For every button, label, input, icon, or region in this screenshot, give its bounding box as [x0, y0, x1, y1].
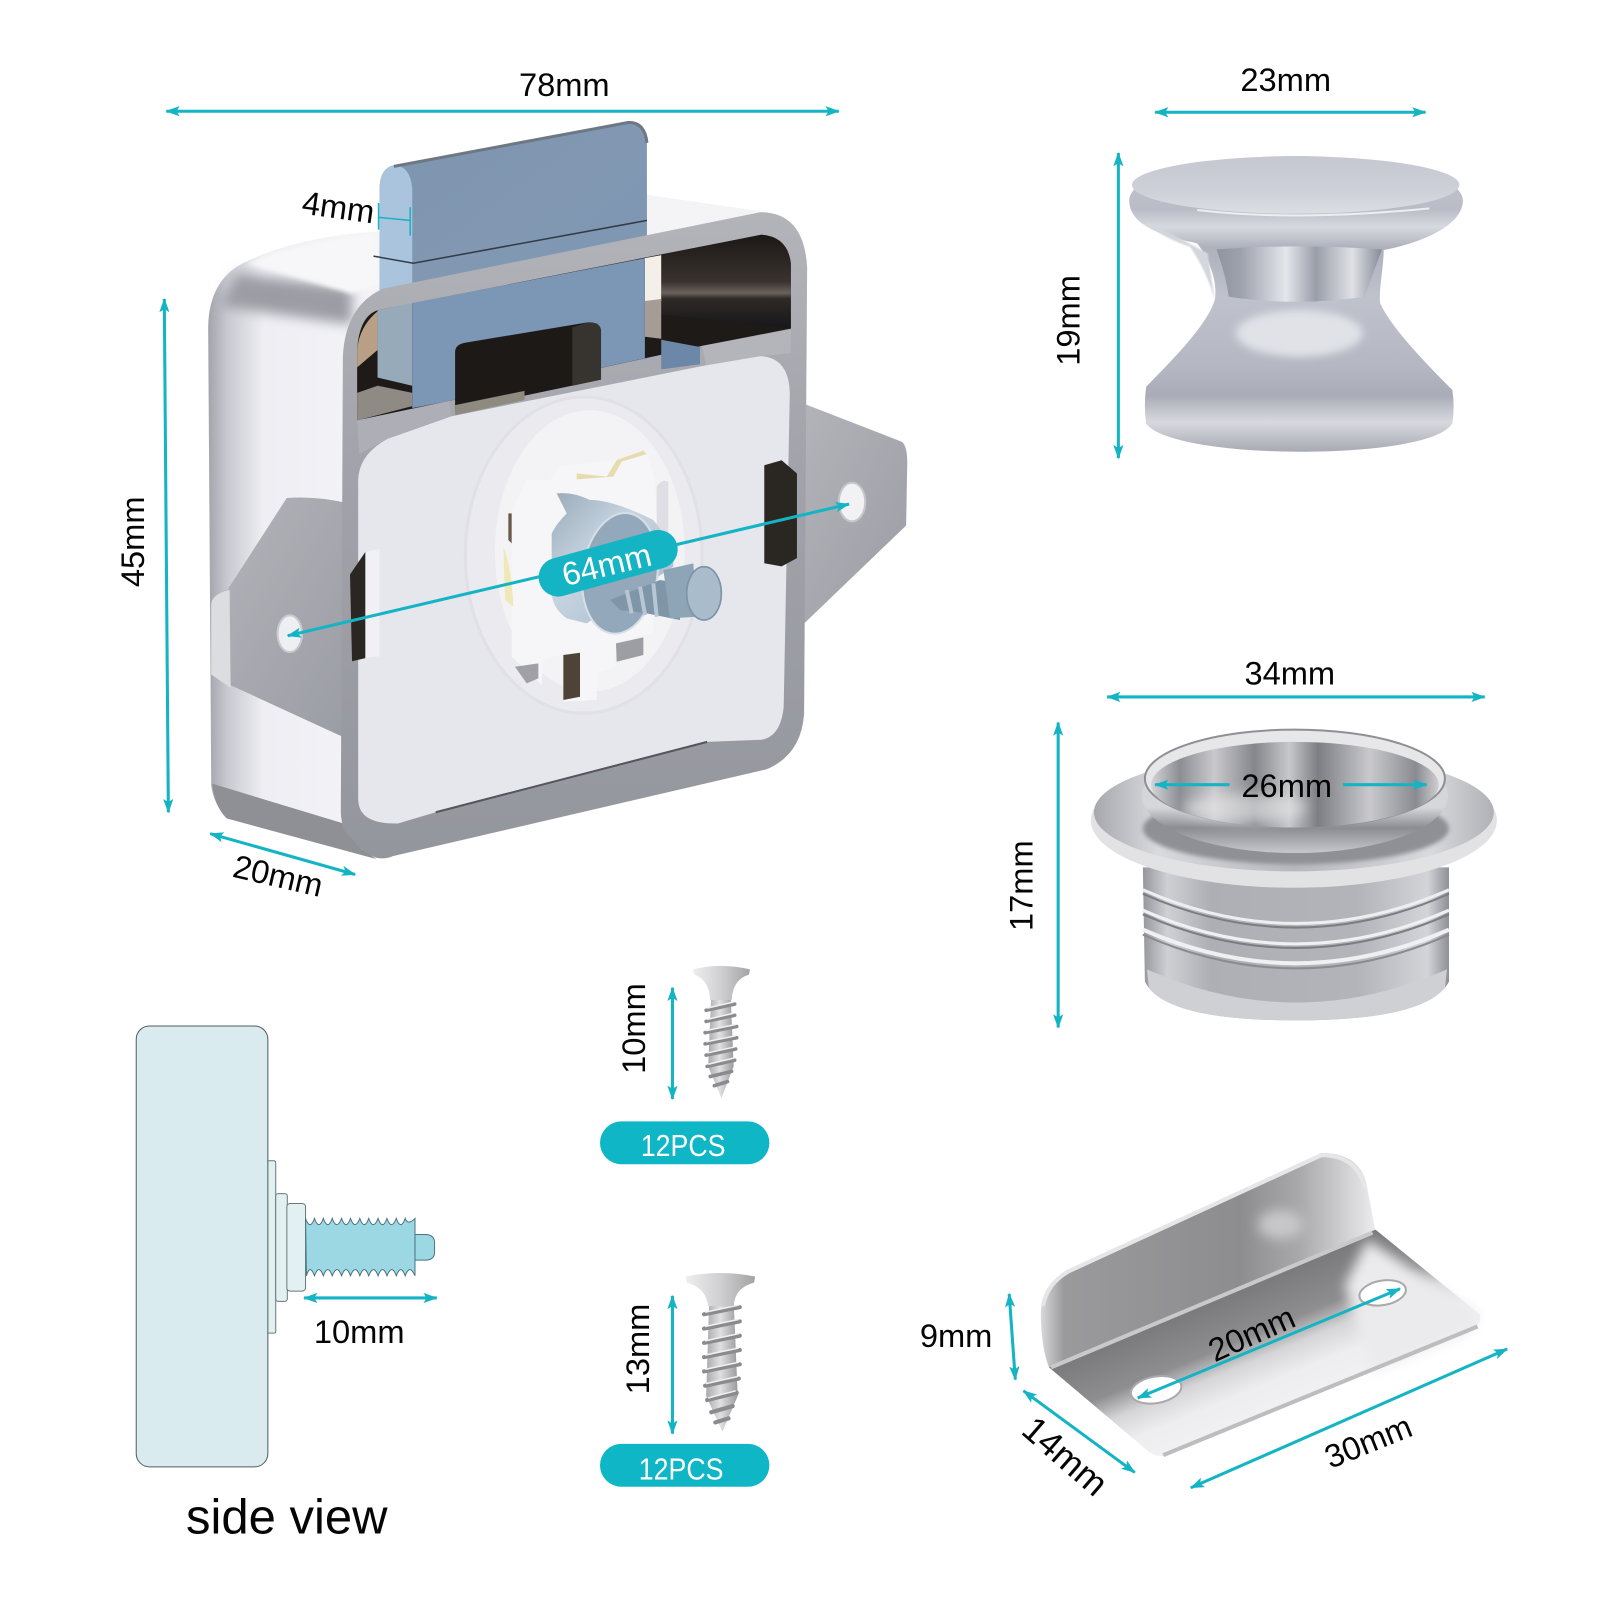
side view body: [136, 1026, 268, 1467]
housing corner shading: [220, 273, 352, 324]
badge: 12PCS long screw: [600, 1444, 769, 1487]
bolt thread: [610, 580, 680, 620]
knob left glint: [1144, 220, 1215, 300]
label: 10mm side view: 10mm: [314, 1313, 405, 1350]
strike plate fold line: [1051, 1233, 1372, 1367]
knob silhouette: [1129, 156, 1463, 452]
yellow tab: [577, 451, 647, 479]
arrow: 26mm right: [1343, 783, 1427, 786]
short screw threads dark: [705, 1004, 737, 1086]
arrow: 34mm: [1107, 695, 1485, 698]
short screw threads light: [706, 1002, 736, 1064]
flange shadow band: [1143, 793, 1449, 864]
bolt tip: [687, 567, 721, 620]
lower left metal tab: [515, 663, 538, 683]
bolt step: [663, 563, 697, 618]
label: 9mm: 9mm: [920, 1317, 992, 1354]
label: 30mm: 30mm: [1319, 1407, 1417, 1476]
inner bracket: [512, 452, 657, 702]
label: 12PCS long: 12PCS: [639, 1453, 723, 1487]
label: 14mm: 14mm: [1014, 1409, 1116, 1504]
dimension: 20mm strike plate: [1138, 1289, 1400, 1398]
dimension: 9mm: [920, 1294, 1015, 1380]
arrow: 10mm side view: [304, 1296, 437, 1299]
left mounting ear: [211, 498, 347, 739]
long screw threads dark: [704, 1307, 740, 1422]
arrow: 19mm: [1117, 153, 1120, 458]
side view boss: [287, 1203, 306, 1291]
label: 64mm: 64mm: [558, 536, 655, 593]
round recess: [465, 397, 702, 713]
long screw threads light: [705, 1305, 739, 1398]
dimension: 13mm screw: [619, 1296, 672, 1434]
housing top right face: [647, 195, 767, 240]
label: 78mm: 78mm: [519, 66, 610, 103]
side view collar: [276, 1194, 287, 1301]
pill: long screw: [600, 1444, 769, 1487]
dimension: 14mm: [1014, 1391, 1135, 1504]
bolt thread ribs: [627, 583, 657, 617]
dimension: 10mm side view: [304, 1298, 437, 1350]
label: 17mm: 17mm: [1003, 840, 1040, 931]
knob neck: [1217, 246, 1382, 302]
strike plate hole right: [1357, 1277, 1408, 1309]
latch lower part: [412, 258, 645, 415]
arrow: 9mm: [1009, 1294, 1015, 1380]
housing bottom edge: [212, 784, 377, 859]
strike plate photo: [1041, 1153, 1480, 1456]
ring top lip: [1145, 730, 1445, 828]
arrow: 20mm strike plate: [1138, 1289, 1400, 1398]
dimension: 10mm screw: [615, 983, 672, 1099]
inner bracket and bolt: [503, 451, 721, 702]
knob rim highlight: [1197, 208, 1429, 215]
label: 23mm: 23mm: [1240, 61, 1331, 98]
front frame: [341, 212, 807, 858]
strike plate upright: [1041, 1153, 1376, 1367]
arrow: 10mm screw: [671, 988, 674, 1099]
arrow: 23mm: [1155, 111, 1426, 114]
strike plate hole left: [1129, 1372, 1184, 1407]
thread bands: [1143, 890, 1449, 968]
side view bolt tip: [415, 1235, 435, 1260]
label: 20mm: 20mm: [230, 847, 326, 904]
pill: 64mm: [534, 525, 682, 601]
opening reflection: [1184, 794, 1306, 822]
side view diagram: [267, 1161, 435, 1333]
dimension: 30mm: [1191, 1349, 1507, 1488]
arrow: 64mm: [288, 504, 849, 636]
side yellow tab: [503, 547, 513, 607]
right mounting ear: [802, 403, 907, 626]
bracket guide slot: [657, 481, 668, 535]
arrow: 45mm: [164, 299, 168, 812]
upright glint: [1258, 1210, 1303, 1239]
side slots: [350, 460, 797, 661]
label: 13mm screw: 13mm: [619, 1304, 656, 1394]
label: 12PCS: 12PCS: [641, 1129, 726, 1163]
floor bright end: [1345, 1240, 1480, 1372]
long screw shaft: [706, 1301, 738, 1432]
bracket shadow: [508, 513, 512, 543]
lock body photo: [208, 121, 907, 859]
label: 19mm: 19mm: [1050, 275, 1087, 366]
lower dark slot: [563, 653, 580, 700]
latch window: [357, 235, 791, 420]
side view threaded bolt: [306, 1218, 415, 1276]
short screw: [693, 966, 750, 1098]
ring cylinder: [1143, 867, 1449, 1020]
housing top face: [247, 232, 380, 294]
side view caption: side view: [186, 1491, 388, 1545]
pill: short screw: [600, 1121, 769, 1164]
label: 45mm: 45mm: [114, 496, 151, 587]
dimension: 20mm depth: [210, 834, 355, 904]
arrow: 14mm: [1023, 1391, 1135, 1472]
bolt base: [552, 493, 673, 623]
long screw head: [686, 1273, 755, 1306]
bolt washer: [575, 508, 665, 639]
strike plate front edge: [1163, 1327, 1478, 1455]
label: 10mm screw: 10mm: [615, 983, 652, 1074]
dimension: 4mm latch: [300, 184, 410, 236]
flange inner collar: [1142, 739, 1448, 853]
label: 20mm strike plate: 20mm: [1202, 1298, 1300, 1369]
upright top edge highlight: [1043, 1155, 1365, 1306]
arrow: 26mm left: [1155, 783, 1230, 786]
label: 26mm: 26mm: [1241, 767, 1332, 804]
arrow: 13mm screw: [671, 1296, 674, 1434]
short screw head: [693, 966, 750, 1000]
knob cone highlight: [1236, 310, 1363, 357]
ring lower band: [1147, 969, 1447, 1020]
long screw: [686, 1273, 755, 1432]
dimension: 64mm hole spacing: [288, 504, 849, 636]
flanged ring photo: [1091, 730, 1497, 1020]
flange rim: [1091, 753, 1497, 888]
flange face: [1094, 753, 1494, 871]
badge: 12PCS short screw: [600, 1121, 769, 1164]
knob top face: [1132, 156, 1459, 214]
latch upper part: [373, 121, 647, 314]
arrow: 30mm: [1191, 1349, 1507, 1488]
ring opening: [1151, 742, 1439, 828]
arrow: 78mm: [166, 110, 839, 113]
lock housing side: [208, 195, 806, 857]
label: 34mm: 34mm: [1244, 655, 1335, 692]
arrow: 20mm: [210, 834, 355, 874]
side view washer: [267, 1161, 276, 1333]
dimension: 45mm: [114, 299, 168, 812]
lower right metal tab: [616, 637, 643, 662]
white back plate: [358, 356, 790, 824]
knob photo: [1129, 156, 1463, 452]
strike plate floor: [1049, 1230, 1480, 1456]
arrow: 17mm: [1057, 722, 1060, 1028]
label: 4mm: 4mm: [300, 184, 377, 230]
short screw shaft: [708, 995, 734, 1098]
tick marks: 4mm: [379, 203, 410, 236]
plate clips: [357, 330, 791, 812]
